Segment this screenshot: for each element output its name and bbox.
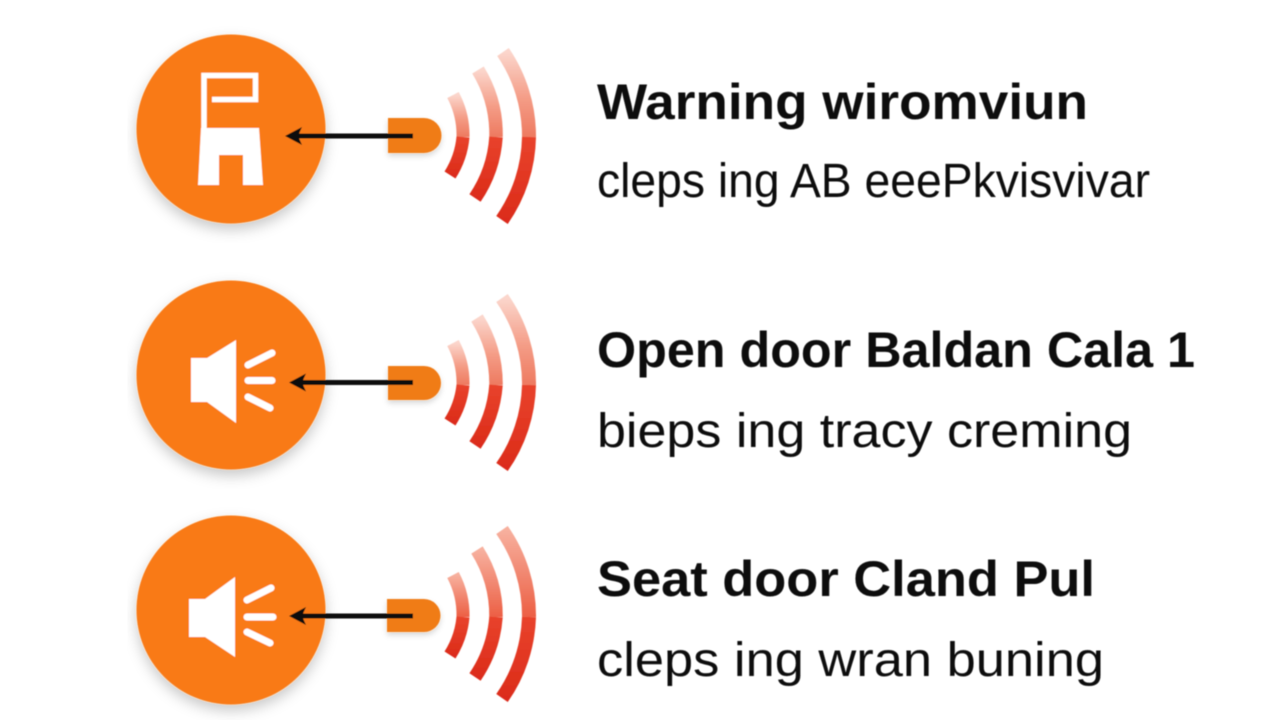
icon: sensor bell 2 [388,366,441,400]
icon: speaker 2 [191,340,272,423]
text 2: bieps ing tracy creming [597,405,1132,458]
text 3: cleps ing wran buning [597,634,1104,687]
icon: sensor bell 3 [387,599,440,632]
heading 3: Seat door Cland Pul [597,551,1095,607]
row 1: warning signal [136,34,1150,224]
icon: orange circle 1 [136,34,326,224]
arrow 2 [289,374,413,392]
row 2: open door signal [136,280,1195,470]
icon: signal waves 1 [450,52,529,220]
icon: orange circle 2 [136,280,326,470]
text 1: cleps ing AB eeePkvisvivar [597,155,1150,208]
row 3: seat door signal [136,516,1104,704]
arrow 1 [285,127,413,145]
icon: signal waves 2 [450,298,529,467]
icon: speaker 3 [189,577,273,657]
icon: sensor bell 1 [388,118,442,153]
icon: orange circle 3 [136,516,326,704]
icon: white door and seat [198,76,263,185]
icon: signal waves 3 [450,530,529,698]
heading 1: Warning wiromviun [597,74,1088,130]
arrow 3 [289,607,413,625]
heading 2: Open door Baldan Cala 1 [597,322,1195,378]
